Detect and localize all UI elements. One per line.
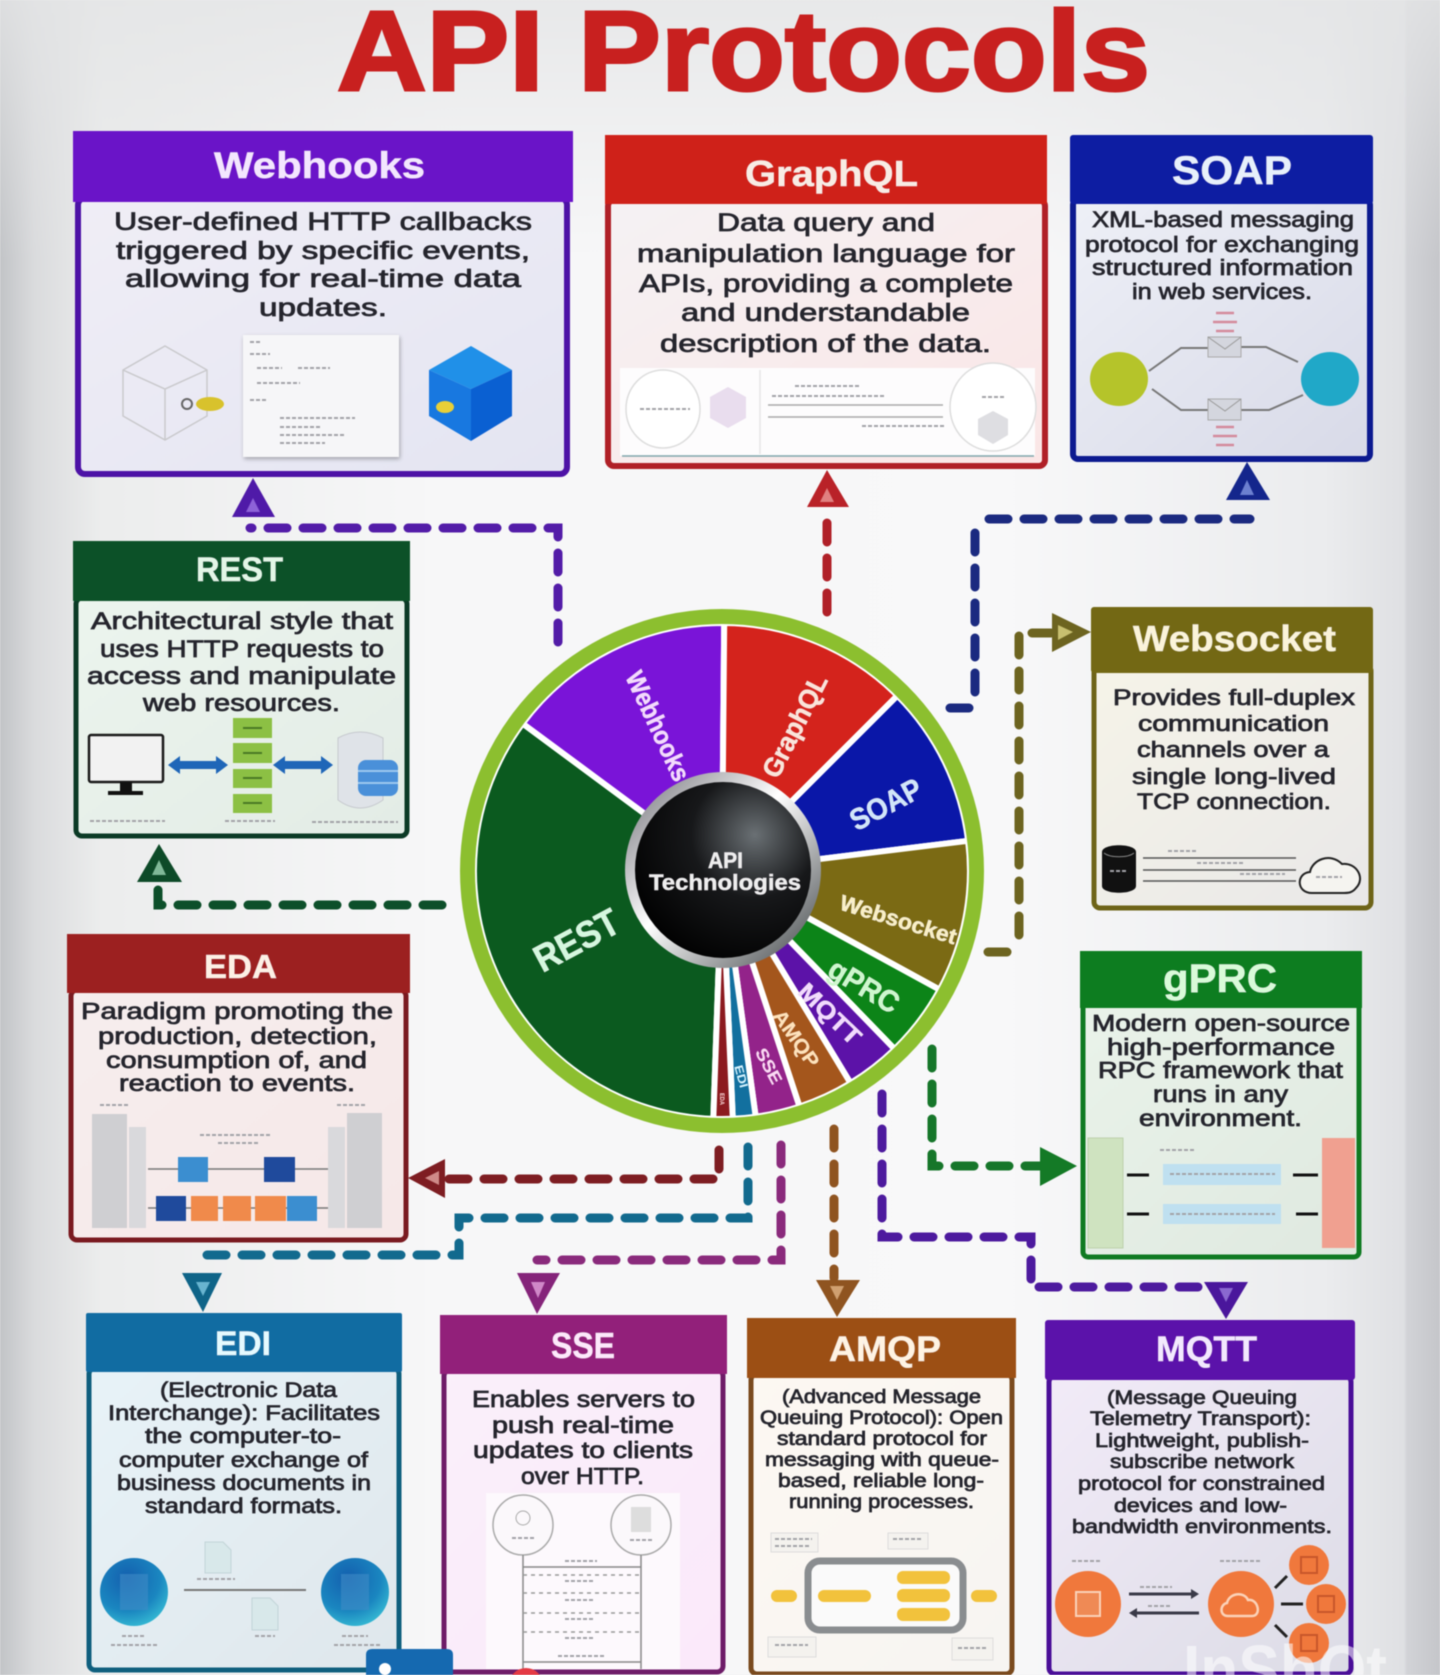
panel: MQTT <box>1045 1320 1355 1674</box>
diagram: client to server query <box>620 363 1036 456</box>
text: GraphQL description: Data query and <box>717 209 935 237</box>
slice: SOAP <box>722 696 968 871</box>
diagram: RPC client and server <box>1088 1138 1355 1248</box>
text: EDI description: computer exchange of <box>119 1449 368 1472</box>
label: SOAP: SOAP <box>844 772 928 838</box>
arrow: wheel to MQTT <box>882 1094 1248 1319</box>
text: gPRC description: runs in any <box>1153 1081 1289 1107</box>
text: EDI description: (Electronic Data <box>160 1379 337 1402</box>
text: AMQP description: running processes. <box>789 1492 974 1513</box>
text: AMQP description: based, reliable long- <box>778 1471 984 1492</box>
text: MQTT description: Telemetry Transport): <box>1090 1409 1311 1430</box>
icon: webhook flow <box>123 335 512 457</box>
panel: GraphQL <box>605 135 1047 466</box>
heading: EDI: EDI <box>215 1325 271 1363</box>
text: Websocket description: single long-lived <box>1132 764 1336 789</box>
text: EDA description: Paradigm promoting the <box>81 998 393 1024</box>
text: SSE description <box>472 1386 695 1489</box>
panel: EDA <box>67 934 410 1240</box>
diagram: event channel <box>92 1105 382 1228</box>
label: MQTT: MQTT <box>792 978 867 1051</box>
slice: GraphQL <box>722 623 897 871</box>
label: REST: REST <box>527 901 627 981</box>
text: SOAP description: structured information <box>1092 255 1353 280</box>
text: EDI description: business documents in <box>117 1472 371 1495</box>
arrow: wheel to AMQP <box>816 1129 860 1317</box>
text: gPRC description: high-performance <box>1107 1034 1335 1060</box>
slice: AMQP <box>722 871 850 1107</box>
panel: SSE <box>440 1315 727 1672</box>
text: MQTT description: protocol for constrained <box>1078 1474 1325 1495</box>
text: REST description: web resources. <box>142 690 340 717</box>
arrow: wheel to REST <box>137 844 442 905</box>
heading: SSE: SSE <box>551 1325 615 1366</box>
chart: API technologies wheel <box>467 616 977 1126</box>
text: AMQP description: Queuing Protocol): Open <box>760 1408 1003 1429</box>
arrow: wheel to EDA <box>408 1150 719 1198</box>
text: EDA description: reaction to events. <box>119 1070 355 1096</box>
text: GraphQL description <box>637 209 1015 358</box>
text: EDI description: the computer-to- <box>145 1425 341 1448</box>
arrow: wheel to Websocket <box>988 613 1091 952</box>
text: Webhooks description <box>114 208 532 322</box>
label: gPRC: gPRC <box>822 953 905 1021</box>
text: Webhooks description: updates. <box>259 294 387 322</box>
hub: API Technologies: API <box>708 848 743 873</box>
diagram: message broker <box>768 1533 997 1660</box>
text: MQTT description: devices and low- <box>1114 1496 1287 1517</box>
text: Websocket description: Provides full-duplex <box>1113 685 1355 710</box>
panel: REST <box>73 541 410 836</box>
text: MQTT description: bandwidth environments. <box>1072 1517 1332 1538</box>
heading: Websocket: Websocket <box>1133 618 1336 659</box>
heading: REST: REST <box>196 551 283 589</box>
text: GraphQL description: APIs, providing a complete <box>639 270 1013 298</box>
text: SOAP description: XML-based messaging <box>1092 207 1354 232</box>
text: gPRC description: RPC framework that <box>1098 1057 1344 1083</box>
diagram: client and server connection <box>1102 845 1360 893</box>
text: SOAP description <box>1085 207 1359 304</box>
heading: AMQP: AMQP <box>829 1330 941 1369</box>
text: MQTT description: (Message Queuing <box>1107 1388 1297 1409</box>
badge: red overlay dot <box>509 1668 543 1675</box>
slice: Webhooks <box>523 623 724 871</box>
text: EDI description <box>108 1379 380 1518</box>
text: SSE description: push real-time <box>492 1412 674 1438</box>
text: AMQP description: messaging with queue- <box>765 1450 999 1471</box>
label: AMQP: AMQP <box>768 1006 823 1072</box>
text: SSE description: over HTTP. <box>521 1463 644 1489</box>
slice: EDA <box>713 871 733 1119</box>
text: Webhooks description: allowing for real-time data <box>125 265 521 293</box>
text: SSE description: updates to clients <box>473 1437 693 1463</box>
arrow: wheel to SOAP <box>950 462 1270 708</box>
text: EDI description: Interchange): Facilitates <box>108 1402 380 1425</box>
slice: gPRC <box>722 871 940 1049</box>
text: gPRC description: Modern open-source <box>1092 1010 1350 1036</box>
panel: AMQP <box>747 1318 1016 1674</box>
label: EDA: EDA <box>718 1093 724 1106</box>
slice: MQTT <box>722 871 895 1083</box>
text: EDA description <box>81 998 393 1096</box>
text: EDI description: standard formats. <box>145 1495 342 1518</box>
arrow: REST to Webhooks <box>232 478 558 642</box>
panel: Webhooks <box>73 131 573 474</box>
panel: EDI <box>86 1313 402 1670</box>
slice: EDI <box>722 871 756 1119</box>
panel: gPRC <box>1080 951 1362 1257</box>
text: SOAP description: protocol for exchanging <box>1085 232 1359 257</box>
text: REST description: access and manipulate <box>87 663 396 690</box>
text: GraphQL description: description of the data. <box>660 330 991 358</box>
panel: Websocket <box>1091 607 1373 908</box>
text: gPRC description: environment. <box>1139 1105 1302 1131</box>
heading: GraphQL: GraphQL <box>745 153 918 194</box>
heading: SOAP: SOAP <box>1172 149 1292 193</box>
arrow: wheel to GraphQL <box>807 470 849 612</box>
label: SSE: SSE <box>751 1045 786 1087</box>
text: Websocket description <box>1113 685 1355 814</box>
text: MQTT description: Lightweight, publish- <box>1095 1431 1309 1452</box>
badge: blue overlay tab <box>366 1649 453 1675</box>
text: AMQP description: (Advanced Message <box>782 1387 981 1408</box>
text: gPRC description <box>1092 1010 1350 1131</box>
text: Websocket description: communication <box>1138 711 1329 736</box>
slice: REST <box>474 724 722 1119</box>
diagram: IoT broker and subscribers <box>1055 1545 1346 1663</box>
text: REST description <box>87 608 396 717</box>
text: Websocket description: channels over a <box>1137 737 1330 762</box>
heading: gPRC: gPRC <box>1163 957 1277 1001</box>
text: AMQP description <box>760 1387 1003 1513</box>
heading: MQTT: MQTT <box>1156 1330 1257 1369</box>
hub: API Technologies: Technologies <box>649 870 801 895</box>
diagram: document exchange <box>100 1542 389 1645</box>
heading: Webhooks: Webhooks <box>214 145 425 186</box>
text: Webhooks description: User-defined HTTP callbacks <box>114 208 532 236</box>
text: REST description: Architectural style that <box>91 608 393 635</box>
label: Websocket: Websocket <box>837 890 961 949</box>
text: GraphQL description: manipulation language for <box>637 240 1015 268</box>
label: GraphQL: GraphQL <box>756 669 834 783</box>
diagram: client server event stream <box>486 1493 680 1669</box>
panel: SOAP <box>1070 135 1373 459</box>
heading: EDA: EDA <box>204 948 277 985</box>
text: MQTT description <box>1072 1388 1332 1538</box>
label: EDI: EDI <box>731 1064 751 1089</box>
text: MQTT description: subscribe network <box>1110 1452 1295 1473</box>
slice: SSE <box>722 871 800 1117</box>
text: SSE description: Enables servers to <box>472 1386 695 1412</box>
text: Webhooks description: triggered by specific events, <box>116 237 530 265</box>
diagram: client, HTTP methods, server <box>89 718 398 822</box>
text: GraphQL description: and understandable <box>681 299 970 327</box>
diagram: SOAP message exchange <box>1090 313 1359 445</box>
text: EDA description: consumption of, and <box>106 1047 367 1073</box>
arrow: wheel to SSE <box>517 1145 781 1314</box>
arrow: wheel to EDI <box>182 1147 748 1312</box>
arrow: wheel to gPRC <box>932 1049 1077 1186</box>
text: AMQP description: standard protocol for <box>777 1429 988 1450</box>
text: Websocket description: TCP connection. <box>1137 789 1331 814</box>
text: EDA description: production, detection, <box>98 1023 377 1049</box>
hub: API Technologies <box>625 772 821 968</box>
slice: Websocket <box>722 841 970 990</box>
label: Webhooks: Webhooks <box>619 666 697 786</box>
text: SOAP description: in web services. <box>1132 279 1312 304</box>
text: REST description: uses HTTP requests to <box>100 636 384 663</box>
